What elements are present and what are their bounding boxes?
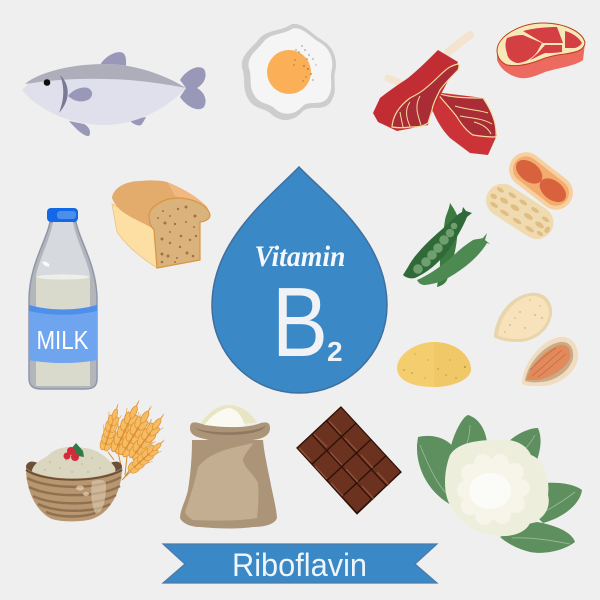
vitamin drop: [212, 167, 387, 393]
icon: peanuts: [480, 145, 580, 245]
icon: milk bottle: [29, 208, 97, 389]
icon: chocolate bar: [297, 407, 401, 514]
bread slice face: [149, 198, 210, 268]
banner: Riboflavin: [163, 544, 437, 583]
text: Vitamin: Vitamin: [254, 240, 346, 273]
icon: beef steak: [497, 23, 585, 78]
text: Riboflavin: Riboflavin: [232, 547, 367, 583]
icon: fried egg: [242, 24, 336, 120]
wheat ears: [96, 396, 172, 480]
pea pod: open with peas: [403, 207, 472, 278]
icon: potato: [397, 342, 471, 387]
porridge: [32, 447, 115, 479]
icon: cauliflower: [417, 415, 582, 553]
peanut: open shell: [502, 145, 580, 217]
steak: left section: [506, 35, 542, 63]
icon: porridge bowl with wheat: [26, 396, 172, 521]
pea pod: closed front: [417, 233, 490, 285]
cauliflower head: [445, 440, 549, 536]
icon: fish: [22, 52, 206, 136]
peanut: closed shell: [480, 177, 560, 245]
milk label: [29, 305, 97, 363]
icon: lamb chops: [373, 35, 497, 155]
text: subscript 2: 2: [327, 336, 343, 367]
bowl rim: [26, 462, 122, 478]
chop: front: [373, 50, 459, 131]
bowl: [26, 468, 122, 521]
leaves: [417, 415, 582, 553]
berries: [64, 443, 84, 461]
pea pod: back: [437, 203, 458, 287]
almond: shelled pale: [494, 293, 552, 342]
almond: with skin: [522, 337, 578, 386]
icon: almonds: [494, 293, 578, 386]
text: B: B: [272, 267, 328, 377]
chop: rear: [430, 92, 497, 155]
icon: pea pods: [403, 203, 490, 287]
milk label: MILK: [36, 325, 89, 355]
icon: bread loaf: [112, 180, 210, 268]
icon: flour sack: [180, 405, 277, 528]
